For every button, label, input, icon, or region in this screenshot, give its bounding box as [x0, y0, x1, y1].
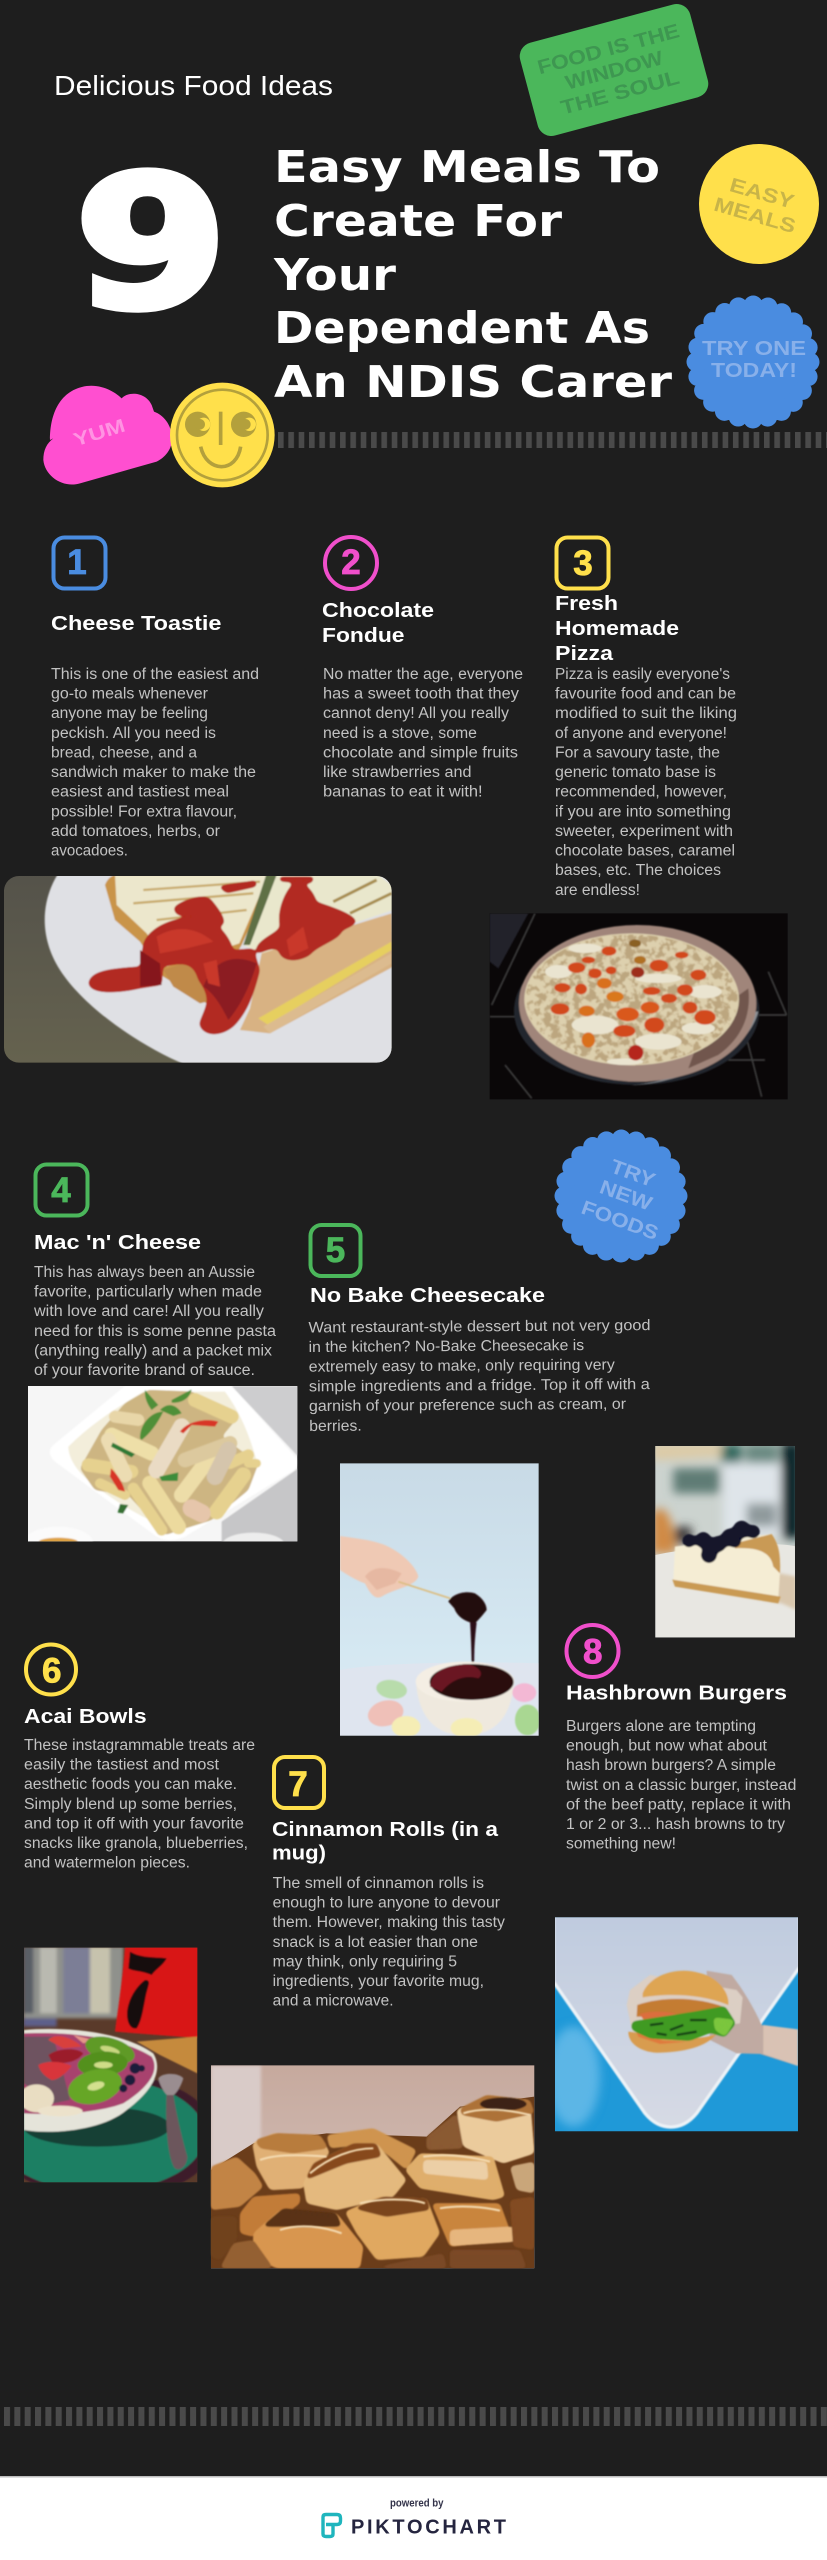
sticker: try new foods: FOODS — [578, 1197, 661, 1245]
body text — [33, 1264, 277, 1379]
body text: need for this is some penne pasta — [34, 1323, 277, 1340]
main title: Dependent As — [274, 303, 650, 354]
badge 5 — [310, 1225, 360, 1276]
body text: avocadoes. — [51, 843, 128, 860]
main title: Easy Meals To — [274, 142, 660, 193]
panel: 7 cinnamon rolls — [207, 1757, 540, 2270]
body text: like strawberries and — [323, 764, 472, 781]
body text: aesthetic foods you can make. — [24, 1776, 237, 1793]
heading: Mac 'n' Cheese — [34, 1232, 201, 1254]
sticker: try one today — [695, 304, 811, 420]
heading: Cheese Toastie — [51, 613, 222, 635]
panel: 6 acai bowls — [24, 1642, 254, 2182]
subtitle: Delicious Food Ideas — [54, 70, 333, 101]
body text: garnish of your preference such as cream, or — [309, 1396, 626, 1415]
body text: bread, cheese, and a — [51, 744, 197, 762]
header — [43, 1, 827, 487]
heading: Cinnamon Rolls (in a — [272, 1819, 499, 1841]
body text: sandwich maker to make the — [51, 764, 256, 781]
body text: favourite food and can be — [555, 686, 736, 703]
badge 7: 7 — [288, 1765, 308, 1804]
body text: and watermelon pieces. — [24, 1855, 190, 1872]
body text: and top it off with your favorite — [24, 1816, 244, 1832]
body text: anyone may be feeling — [51, 705, 208, 722]
sticker: try one today: TODAY! — [711, 360, 797, 382]
powered by: powered by — [390, 2498, 444, 2510]
badge 8 — [566, 1625, 618, 1677]
divider stripes bottom — [4, 2407, 827, 2426]
photo: pizza in oven — [490, 914, 788, 1100]
heading: Chocolate — [322, 600, 434, 622]
heading: No Bake Cheesecake — [310, 1285, 545, 1307]
body text: This is one of the easiest and — [51, 666, 259, 683]
body text: No matter the age, everyone — [323, 666, 523, 683]
body text — [51, 666, 259, 860]
panel: 8 hashbrown burgers — [547, 1625, 805, 2140]
body text: peckish. All you need is — [51, 725, 216, 742]
body text — [566, 1718, 796, 1853]
sticker: try new foods: TRY — [607, 1156, 659, 1192]
panel: 3 fresh homemade pizza — [485, 538, 795, 1105]
body text: if you are into something — [555, 803, 731, 820]
sticker: food is the window the soul: FOOD IS THE — [535, 20, 682, 79]
body text: enough to lure anyone to devour — [273, 1895, 500, 1912]
sticker: yum cloud — [43, 386, 172, 484]
panel: 4 mac n cheese — [23, 1164, 305, 1560]
heading — [555, 593, 679, 665]
badge 6 — [26, 1644, 76, 1694]
heading: Fondue — [322, 625, 404, 647]
body text: of anyone and everyone! — [555, 725, 727, 742]
heading: Fresh — [555, 593, 618, 615]
photo: cinnamon rolls — [207, 2063, 540, 2270]
body text: Simply blend up some berries, — [24, 1796, 237, 1813]
body text — [555, 666, 737, 899]
body text: them. However, making this tasty — [273, 1914, 505, 1931]
badge 1: 1 — [67, 543, 87, 582]
main title: Your — [273, 250, 396, 301]
heading: Pizza — [555, 643, 614, 665]
badge 4: 4 — [51, 1171, 71, 1210]
body text: with love and care! All you really — [33, 1303, 264, 1320]
photo: penne pasta bowl — [28, 1386, 298, 1542]
body text: For a savoury taste, the — [555, 744, 720, 762]
body text: has a sweet tooth that they — [323, 686, 519, 703]
body text: bases, etc. The choices — [555, 862, 721, 879]
main title — [273, 142, 672, 408]
body text: Want restaurant-style dessert but not very good — [308, 1317, 651, 1336]
sticker: yum cloud: YUM — [71, 416, 128, 451]
heading: Acai Bowls — [24, 1706, 147, 1728]
badge 3: 3 — [573, 544, 593, 583]
body text: recommended, however, — [555, 784, 727, 801]
photo: burger in hand — [547, 1910, 805, 2140]
body text: snacks like granola, blueberries, — [24, 1835, 248, 1852]
body text: easily the tastiest and most — [24, 1757, 220, 1774]
heading: Homemade — [555, 618, 679, 640]
body text: need is a stove, some — [323, 725, 477, 742]
body text: twist on a classic burger, instead — [566, 1777, 796, 1794]
body text: modified to suit the liking — [555, 705, 737, 722]
piktochart wordmark: PIKTOCHART — [351, 2516, 506, 2538]
heading: mug) — [272, 1842, 326, 1864]
body text: chocolate bases, caramel — [555, 843, 735, 860]
body text: may think, only requiring 5 — [273, 1954, 457, 1970]
badge 4 — [36, 1164, 88, 1216]
body text: are endless! — [555, 882, 640, 899]
body text: and a microwave. — [273, 1993, 394, 2010]
footer — [0, 2476, 827, 2560]
body text: favorite, particularly when made — [34, 1284, 262, 1301]
body text: chocolate and simple fruits — [323, 744, 518, 762]
badge 1 — [54, 538, 106, 588]
photo: cheesecake slice — [655, 1446, 795, 1638]
body text: snack is a lot easier than one — [273, 1934, 478, 1951]
body text: berries. — [309, 1418, 362, 1435]
body text — [24, 1737, 255, 1872]
badge 8: 8 — [583, 1632, 602, 1672]
body text: bananas to eat it with! — [323, 784, 483, 801]
body text: enough, but now what about — [566, 1738, 768, 1755]
heading — [272, 1819, 499, 1864]
badge 6: 6 — [42, 1652, 61, 1690]
body text: cannot deny! All you really — [323, 705, 509, 722]
body text — [323, 666, 523, 801]
body text: 1 or 2 or 3... hash browns to try — [566, 1816, 785, 1833]
badge 5: 5 — [326, 1231, 345, 1270]
sticker: food is the window the soul: THE SOUL — [558, 67, 682, 120]
sticker: easy meals: EASY — [727, 174, 797, 214]
body text: of your favorite brand of sauce. — [34, 1362, 255, 1379]
body text: Pizza is easily everyone's — [555, 666, 730, 683]
photo: chocolate fondue marshmallow — [335, 1460, 542, 1738]
heading: Hashbrown Burgers — [566, 1682, 787, 1704]
badge 2: 2 — [341, 543, 361, 582]
body text: add tomatoes, herbs, or — [51, 823, 220, 840]
body text: easiest and tastiest meal — [51, 784, 229, 801]
badge 7 — [274, 1757, 324, 1808]
main title: Create For — [274, 196, 562, 247]
body text: ingredients, your favorite mug, — [273, 1973, 484, 1990]
badge 2 — [325, 537, 377, 589]
body text: Burgers alone are tempting — [566, 1718, 756, 1735]
divider stripes — [278, 432, 827, 448]
body text: This has always been an Aussie — [34, 1264, 255, 1281]
sticker: try new foods: NEW — [597, 1176, 655, 1216]
body text: sweeter, experiment with — [555, 823, 733, 840]
sticker: food is the window the soul — [517, 1, 711, 139]
body text: in the kitchen? No-Bake Cheesecake is — [309, 1337, 585, 1356]
sticker: try one today: TRY ONE — [702, 338, 806, 360]
body text: hash brown burgers? A simple — [566, 1757, 776, 1774]
body text: The smell of cinnamon rolls is — [273, 1875, 484, 1892]
photo: cheese toastie with ketchup — [0, 870, 400, 1070]
panel: 1 cheese toastie — [0, 538, 400, 1070]
big number 9: 9 — [74, 137, 228, 350]
body text: generic tomato base is — [555, 764, 716, 781]
piktochart logo icon — [323, 2514, 340, 2536]
sticker: try new foods — [563, 1138, 679, 1254]
body text: simple ingredients and a fridge. Top it off with a — [309, 1376, 650, 1395]
main title: An NDIS Carer — [274, 357, 672, 408]
sticker: easy meals: MEALS — [711, 194, 798, 238]
body text — [273, 1875, 505, 2010]
body text: of the beef patty, replace it with — [566, 1796, 791, 1814]
sticker: food is the window the soul: WINDOW — [563, 47, 666, 95]
body text: (anything really) and a packet mix — [34, 1342, 272, 1360]
body text — [308, 1317, 651, 1435]
body text: extremely easy to make, only requiring very — [309, 1357, 615, 1376]
panel: 5 no bake cheesecake — [308, 1225, 802, 1640]
badge 3 — [556, 538, 608, 588]
body text: These instagrammable treats are — [24, 1737, 255, 1754]
body text: possible! For extra flavour, — [51, 803, 237, 820]
sticker: smiley face — [170, 383, 275, 487]
sticker: easy meals — [699, 144, 819, 264]
heading — [322, 600, 434, 647]
body text: something new! — [566, 1836, 676, 1853]
panel: 2 chocolate fondue — [322, 537, 523, 801]
body text: go-to meals whenever — [51, 686, 208, 703]
photo: acai bowl — [24, 1948, 198, 2182]
